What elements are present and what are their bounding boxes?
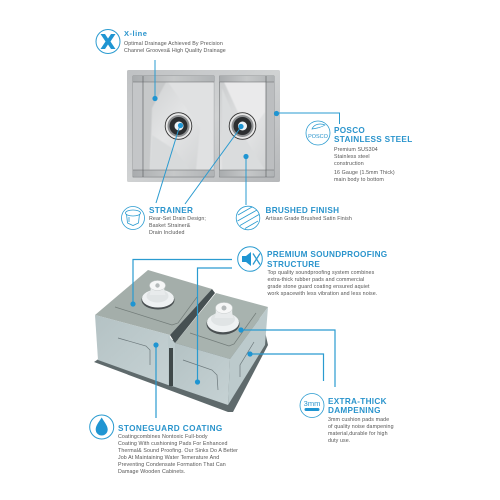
divider gap [170,289,215,343]
text: soundproofing [268,270,377,297]
icon: POSCO [306,121,330,145]
heading: soundproofing: STRUCTURE [267,260,320,269]
heading: POSCO [334,126,412,144]
icon: 3mm [300,394,324,418]
text: stoneguard: Damage Wooden Cabinets. [118,469,185,475]
right drain [229,113,256,139]
right bowl [220,76,274,177]
text: stoneguard: Job At Maintaining Water Temerature And [118,455,219,461]
text: POSCO: 16 Gauge (1.5mm Thick) [334,170,395,176]
heading: POSCO: STAINLESS STEEL [334,135,412,144]
text: strainer [149,216,206,236]
right bowl box [175,293,268,405]
text: extra-thick: material,durable for high [328,431,388,437]
text: stoneguard [118,434,238,475]
text: strainer: Basket Strainer& [149,223,190,229]
text: extra-thick: 3mm cushion pads made [328,417,389,423]
text: extra-thick: duty use. [328,438,350,444]
icon: brushed finish [236,206,260,230]
base flange [94,318,268,412]
icon: water drop [90,415,114,439]
left strainer [142,280,174,310]
icon: X-line [96,30,120,54]
text: POSCO [334,146,395,183]
left drain [165,113,192,139]
text: extra-thick: of quality noise dampening [328,424,394,430]
heading: POSCO: POSCO [334,126,365,134]
top sink callout dots [152,96,279,159]
text: strainer: Drain Included [149,230,185,236]
text: stoneguard: Coating With cushioning Pads For Enhanced [118,441,228,447]
text: soundproofing: grade stone guard coating ensured aquiet [268,284,370,290]
text: POSCO: construction [334,161,364,167]
text: X-line: Channel Grooves& High Quality Drainage [124,48,226,54]
heading: soundproofing: PREMIUM SOUNDPROOFING [267,250,387,259]
bottom sink callout lines [133,260,335,418]
bottom sink callout dots [130,301,253,385]
text: POSCO: Premium SUS304 [334,146,378,152]
text: X-line: Optimal Drainage Achieved By Precision [124,40,223,46]
text: POSCO: main body to bottom [334,177,384,183]
text: soundproofing: work spacewith less vibration and less noise. [268,291,377,297]
text: brushed finish: Artisan Grade Brushed Satin Finish [266,216,352,222]
heading: X-line: X-line [124,29,147,38]
heading: extra-thick: EXTRA-THICK [328,397,387,406]
left bowl [133,76,214,177]
heading: stoneguard: STONEGUARD COATING [118,424,223,433]
icon: strainer [122,206,144,230]
bottom sink [94,270,268,412]
heading: brushed finish: BRUSHED FINISH [266,206,339,215]
left bowl box [95,270,212,385]
heading: strainer: STRAINER [149,206,193,215]
heading: soundproofing [267,250,387,269]
top sink callout lines [155,60,340,205]
text: POSCO: Stainless steel [334,154,370,160]
text: extra-thick [328,417,394,444]
text: stoneguard: Preventing Condensate Formation That Can [118,462,226,468]
text: stoneguard: Thermal& Sound Proofing. Our Sinks Do A Better [118,448,238,454]
icon: 3mm: 3mm [304,399,320,408]
icon: soundproofing [238,247,262,271]
text: stoneguard: Coatingcombines Nontoxic Full-body [118,434,208,440]
right strainer [206,302,240,334]
heading: extra-thick [328,397,387,415]
top sink [127,70,280,182]
text: X-line [124,40,226,54]
heading: extra-thick: DAMPENING [328,406,381,415]
icon: POSCO: POSCO [308,134,329,140]
text: soundproofing: Top quality soundproofing system combines [268,270,374,276]
text: strainer: Rear-Set Drain Design; [149,216,206,222]
text: soundproofing: extra-thick rubber pads and commercial [268,277,364,283]
